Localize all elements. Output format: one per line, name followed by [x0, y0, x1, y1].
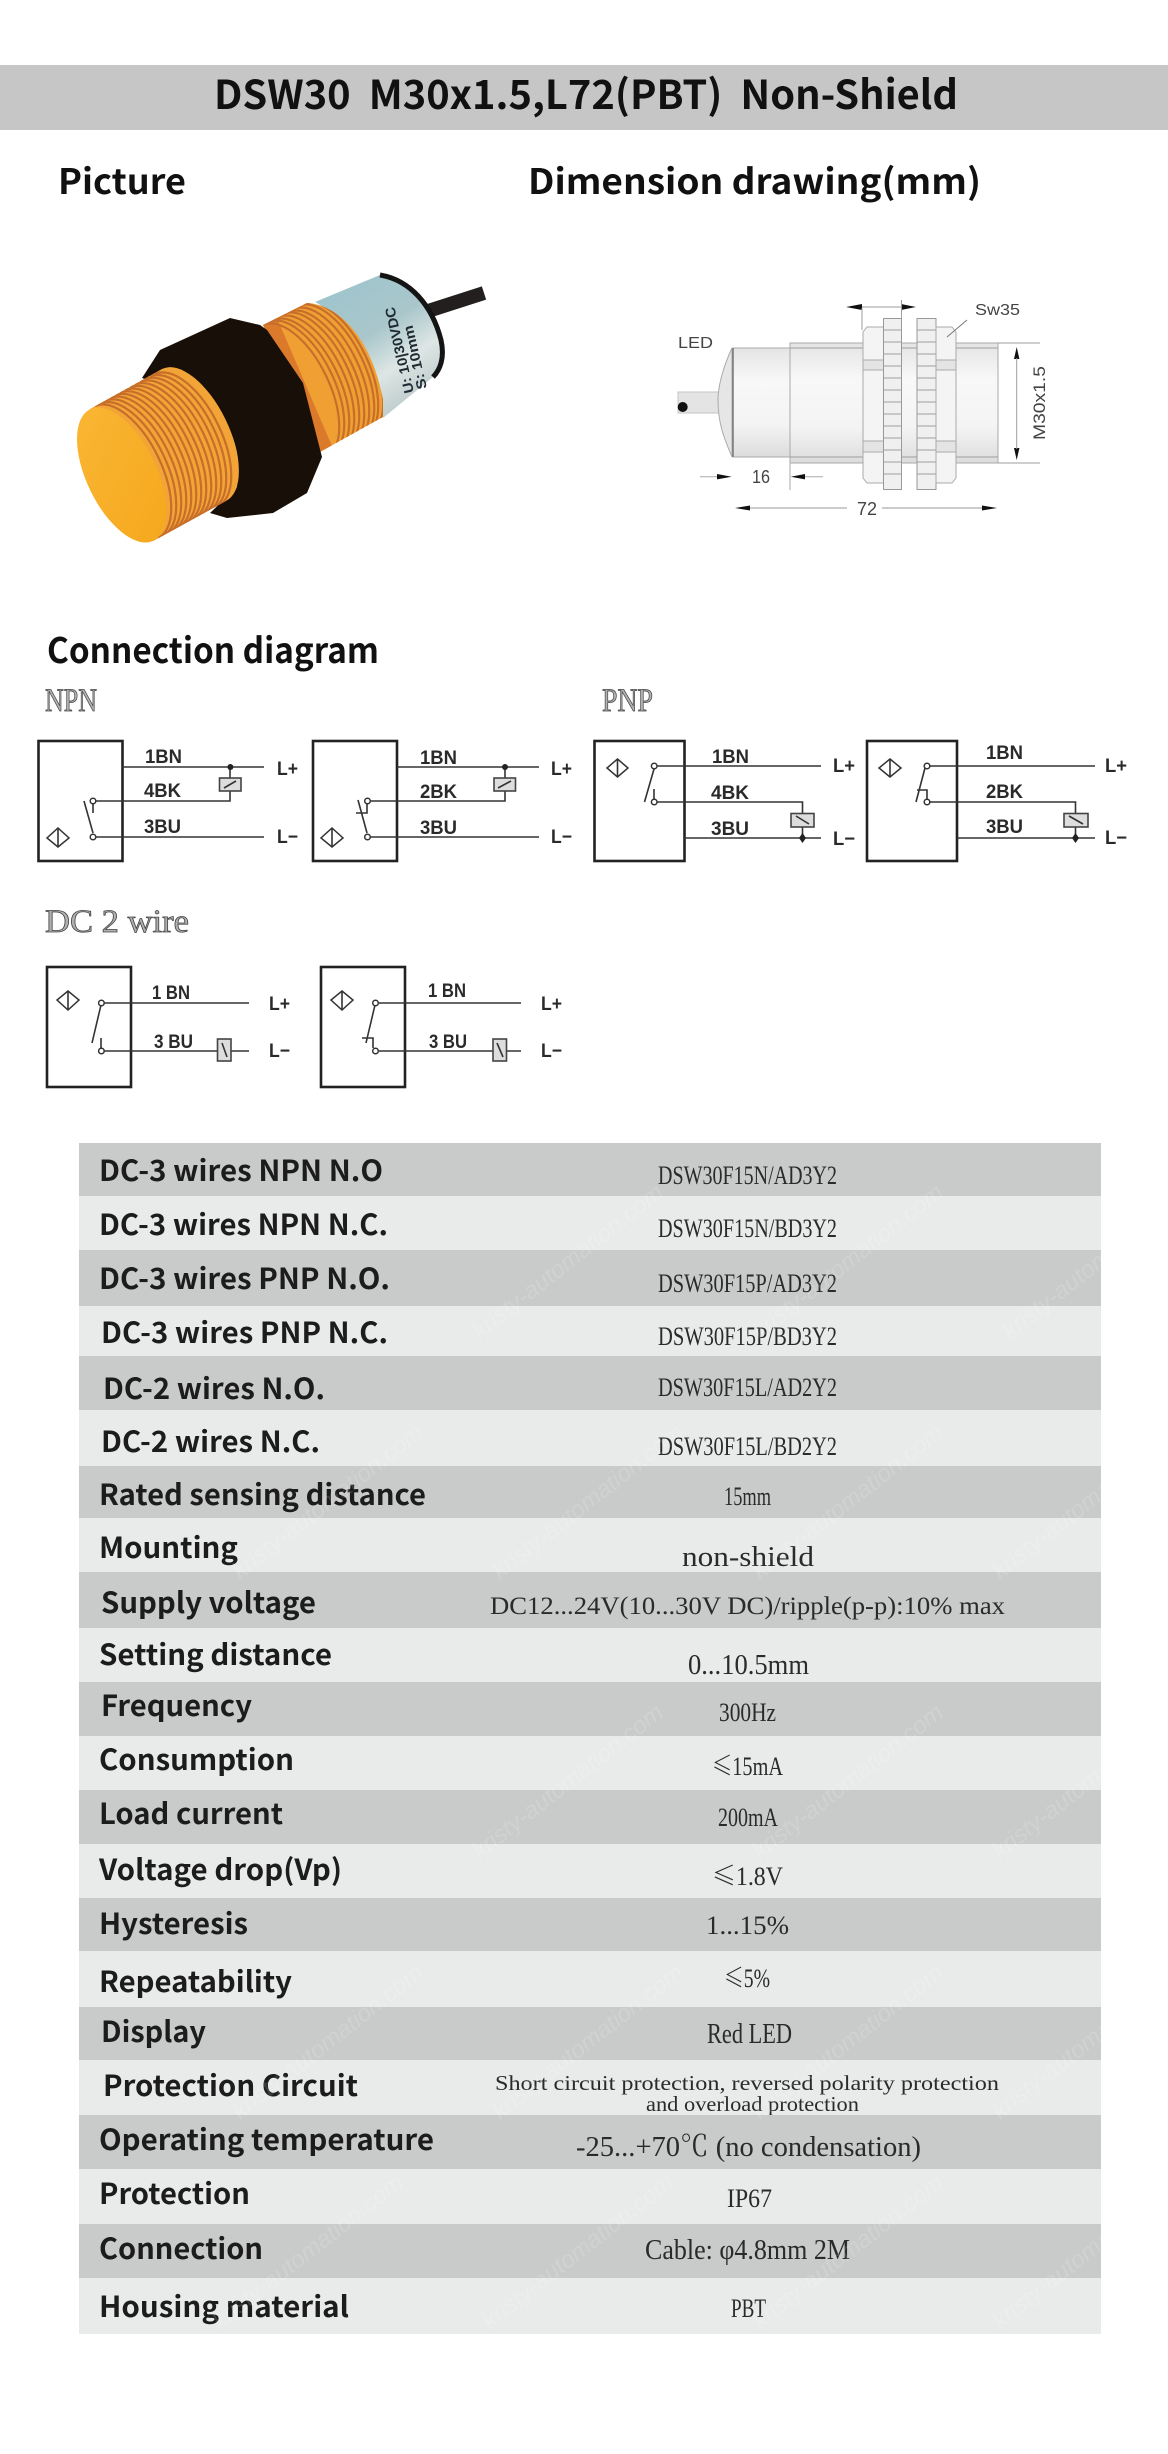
row: DC-3 wires PNP N.O. — [79, 1250, 1101, 1306]
row: Repeatability — [79, 1951, 1101, 2007]
wiring diagram: DC 2 wire N.C.: 3 BU — [429, 1032, 467, 1053]
wiring diagram: NPN N.O.: 4BK — [144, 781, 181, 802]
wiring diagram: PNP N.O.: L− — [833, 829, 855, 850]
wiring diagram: PNP N.O.: 1BN — [712, 747, 749, 768]
row: Operating temperature: -25...+70℃ (no condensation) — [576, 2131, 921, 2163]
watermarks: kristy-automation.com — [747, 1179, 949, 1345]
specification table — [79, 1143, 1101, 2334]
row: Mounting — [79, 1518, 1101, 1573]
cable — [425, 293, 484, 312]
row: Load current: Load current — [99, 1791, 283, 1833]
wiring diagram: DC 2 wire N.O.: 3 BU — [154, 1032, 193, 1053]
nut left — [863, 318, 902, 490]
row: DC-3 wires PNP N.O.: DC-3 wires PNP N.O. — [99, 1256, 390, 1298]
heading: dimension drawing: Dimension drawing(mm) — [528, 154, 981, 205]
product photo: sensor — [59, 275, 484, 556]
row: DC-3 wires PNP N.C.: DSW30F15P/BD3Y2 — [658, 1322, 837, 1351]
label: LED: LED — [678, 335, 713, 352]
rear thread — [263, 303, 383, 452]
wrench size arrow — [846, 304, 916, 310]
row: Voltage drop(Vp): Voltage drop(Vp) — [98, 1847, 342, 1889]
nut right — [917, 318, 956, 490]
wiring diagram: NPN N.C.: 1BN — [420, 748, 457, 769]
row: Protection — [79, 2169, 1101, 2224]
row: Supply voltage: DC12...24V(10...30V DC)/ripple(p-p):10% max — [490, 1593, 1006, 1620]
title bar — [0, 63, 1168, 130]
row: Supply voltage: Supply voltage — [101, 1580, 316, 1622]
dimension: diameter — [998, 343, 1049, 463]
row: DC-2 wires N.O.: DSW30F15L/AD2Y2 — [658, 1373, 837, 1402]
row: DC-2 wires N.O.: DC-2 wires N.O. — [103, 1366, 325, 1408]
row: DC-3 wires NPN N.C. — [79, 1196, 1101, 1250]
wiring diagram: DC 2 wire N.O.: 1 BN — [152, 983, 190, 1004]
row: DC-2 wires N.C.: DSW30F15L/BD2Y2 — [658, 1432, 837, 1461]
row: Protection Circuit: and overload protection — [646, 2092, 860, 2116]
row: Setting distance — [79, 1628, 1101, 1682]
row: Load current: 200mA — [718, 1803, 778, 1832]
dimension: 16: 16 — [752, 467, 770, 487]
row: Repeatability: Repeatability — [99, 1959, 292, 2001]
wiring diagram: PNP N.O.: 4BK — [711, 783, 749, 804]
wiring diagram: NPN N.O.: 3BU — [144, 817, 181, 838]
row: DC-3 wires NPN N.O — [79, 1143, 1101, 1196]
nut — [142, 318, 322, 518]
row: Consumption: Consumption — [99, 1737, 294, 1779]
row: Rated sensing distance — [79, 1466, 1101, 1518]
heading: connection diagram: Connection diagram — [47, 623, 379, 674]
wiring diagram: PNP N.C.: 1BN — [986, 743, 1023, 764]
row: Operating temperature: Operating temperature — [99, 2117, 434, 2159]
wiring diagram: PNP N.C.: 3BU — [986, 817, 1023, 838]
row: Housing material: Housing material — [99, 2284, 349, 2326]
subheading: NPN: NPN — [45, 683, 97, 719]
row: DC-3 wires PNP N.O.: DSW30F15P/AD3Y2 — [658, 1269, 837, 1298]
row: Hysteresis: Hysteresis — [99, 1901, 248, 1943]
wiring diagram: PNP N.C.: L− — [1105, 828, 1127, 849]
wiring diagram: DC 2 wire N.O.: L− — [269, 1041, 290, 1062]
wiring diagram: PNP N.O.: L+ — [833, 756, 855, 777]
wiring diagram: DC 2 wire N.O.: L+ — [269, 994, 290, 1015]
wiring diagram: NPN N.O.: L− — [277, 827, 298, 848]
row: Protection Circuit: Short circuit protection, reversed polarity protection — [495, 2071, 1000, 2095]
metal tail — [315, 275, 442, 418]
dimension drawing — [678, 300, 1049, 519]
watermarks: kristy-automation.com — [747, 2169, 949, 2335]
wiring diagram: PNP N.O. — [594, 741, 855, 861]
row: Connection: Cable: φ4.8mm 2M — [645, 2235, 850, 2266]
wiring diagram: PNP N.C.: 2BK — [986, 782, 1023, 803]
silver gap behind nut — [215, 408, 238, 490]
row: DC-2 wires N.C. — [79, 1410, 1101, 1466]
wiring diagram: DC 2 wire N.O. — [47, 967, 290, 1087]
row: Protection Circuit — [79, 2060, 1101, 2116]
subheading: DC 2 wire: DC 2 wire — [45, 904, 189, 940]
row: DC-2 wires N.O. — [79, 1356, 1101, 1410]
watermarks — [207, 1179, 1168, 2335]
wiring diagram: DC 2 wire N.C.: L+ — [541, 994, 562, 1015]
threaded body — [790, 343, 998, 463]
sensing face — [59, 394, 185, 556]
row: Supply voltage — [79, 1572, 1101, 1628]
row: Hysteresis: 1...15% — [706, 1911, 789, 1940]
row: Display: Display — [101, 2009, 206, 2051]
row: Rated sensing distance: Rated sensing distance — [99, 1472, 426, 1514]
wiring diagram: DC 2 wire N.C.: 1 BN — [428, 981, 466, 1002]
row: Consumption — [79, 1736, 1101, 1790]
wiring diagram: NPN N.O.: L+ — [277, 759, 298, 780]
watermarks: kristy-automation.com — [207, 2169, 409, 2335]
row: Housing material — [79, 2278, 1101, 2334]
row: Mounting: Mounting — [99, 1525, 238, 1567]
wiring diagram: DC 2 wire N.C. — [321, 967, 562, 1087]
printed text on sensor: U: 10|30VDC — [382, 306, 417, 395]
watermarks: kristy-automation.com — [747, 1699, 949, 1865]
row: Connection — [79, 2224, 1101, 2278]
row: Mounting: non-shield — [682, 1541, 815, 1573]
row: Repeatability: ≤5% — [724, 1958, 770, 1995]
wiring diagram: NPN N.C.: 2BK — [420, 782, 457, 803]
watermarks: kristy-automation.com — [227, 1419, 429, 1585]
row: Display — [79, 2007, 1101, 2060]
wiring diagram: PNP N.C.: L+ — [1105, 756, 1127, 777]
row: Frequency — [79, 1682, 1101, 1736]
product photo: sensor: S: 10mm — [400, 324, 430, 391]
dimension: 16 — [700, 463, 823, 490]
watermarks: kristy-automation.com — [747, 1959, 949, 2125]
row: Voltage drop(Vp) — [79, 1844, 1101, 1898]
row: Connection: Connection — [99, 2226, 263, 2268]
row: Voltage drop(Vp): ≤1.8V — [712, 1856, 783, 1893]
dimension: diameter: M30x1.5 — [1030, 366, 1049, 440]
dimension: 72 — [735, 499, 997, 519]
watermarks: kristy-automation.com — [747, 1419, 949, 1585]
row: Setting distance: Setting distance — [99, 1632, 332, 1674]
front thread — [90, 367, 239, 541]
row: DC-3 wires PNP N.C.: DC-3 wires PNP N.C. — [101, 1310, 388, 1352]
watermarks: kristy-automation.com — [487, 1419, 689, 1585]
title text: DSW30 M30x1.5,L72(PBT) Non-Shield — [214, 63, 958, 121]
watermarks: kristy-automation.com — [467, 1179, 669, 1345]
dimension: 72: 72 — [857, 499, 877, 519]
row: Protection: Protection — [99, 2171, 250, 2213]
wiring diagram: NPN N.O. — [38, 741, 298, 861]
row: Rated sensing distance: 15mm — [724, 1482, 771, 1511]
heading: picture: Picture — [58, 154, 186, 205]
cable stub — [678, 392, 720, 413]
row: Frequency: Frequency — [101, 1683, 252, 1725]
front body — [733, 348, 790, 457]
row: DC-3 wires NPN N.O: DSW30F15N/AD3Y2 — [658, 1161, 837, 1190]
wiring diagram: PNP N.O.: 3BU — [711, 819, 749, 840]
row: Consumption: ≤15mA — [712, 1746, 783, 1783]
wiring diagram: PNP N.C. — [867, 741, 1127, 861]
row: Housing material: PBT — [731, 2294, 766, 2323]
wiring diagram: DC 2 wire N.C.: L− — [541, 1041, 562, 1062]
row: DC-3 wires PNP N.C. — [79, 1306, 1101, 1356]
wiring diagram: NPN N.C.: L− — [551, 827, 572, 848]
row: Display: Red LED — [707, 2019, 792, 2050]
row: DC-2 wires N.C.: DC-2 wires N.C. — [101, 1419, 320, 1461]
watermarks: kristy-automation.com — [227, 1959, 429, 2125]
watermarks: kristy-automation.com — [477, 2169, 679, 2335]
row: Protection Circuit: Protection Circuit — [103, 2063, 358, 2105]
wiring diagram: NPN N.C.: 3BU — [420, 818, 457, 839]
row: Hysteresis — [79, 1898, 1101, 1951]
row: DC-3 wires NPN N.C.: DSW30F15N/BD3Y2 — [658, 1214, 837, 1243]
wiring diagram: NPN N.C.: L+ — [551, 759, 572, 780]
row: DC-3 wires NPN N.O: DC-3 wires NPN N.O — [99, 1148, 383, 1190]
row: Protection: IP67 — [727, 2184, 772, 2213]
wiring diagram: NPN N.C. — [313, 741, 572, 861]
wiring diagram: NPN N.O.: 1BN — [145, 747, 182, 768]
row: Operating temperature — [79, 2115, 1101, 2169]
watermarks: kristy-automation.com — [467, 1699, 669, 1865]
row: Setting distance: 0...10.5mm — [688, 1650, 809, 1681]
row: Load current — [79, 1790, 1101, 1844]
watermarks: kristy-automation.com — [487, 1959, 689, 2125]
row: DC-3 wires NPN N.C.: DC-3 wires NPN N.C. — [99, 1202, 388, 1244]
label: Sw35: Sw35 — [975, 302, 1020, 319]
row: Frequency: 300Hz — [719, 1698, 776, 1727]
subheading: PNP: PNP — [602, 683, 653, 719]
